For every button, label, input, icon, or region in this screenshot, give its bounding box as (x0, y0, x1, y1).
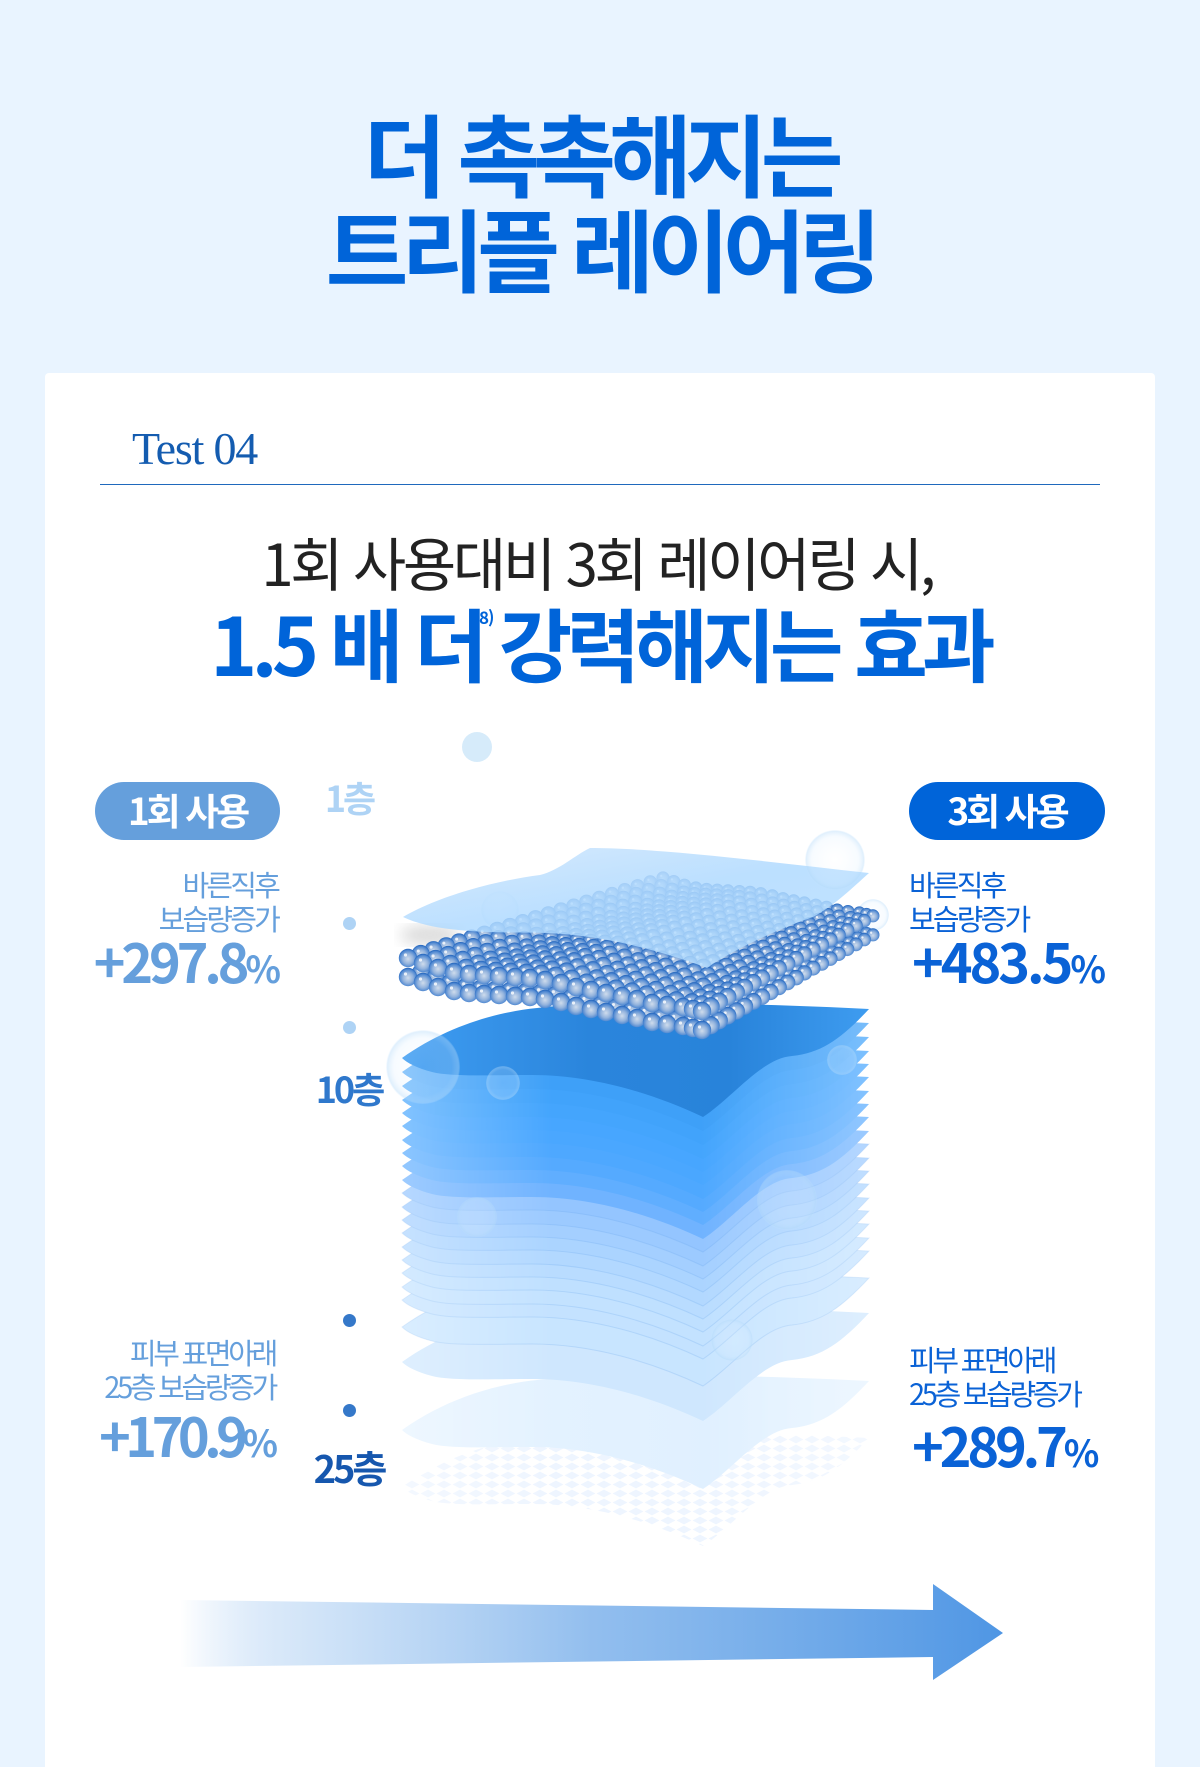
right stat bottom text: 피부 표면아래 (909, 1338, 1054, 1380)
left stat bottom text: 피부 표면아래 (130, 1331, 275, 1373)
footnote mark: 8) (479, 604, 493, 629)
bubbles (386, 732, 865, 1361)
headline: 1.5 배 더 강력해지는 효과 (210, 584, 990, 700)
test label: Test 04 (132, 423, 257, 474)
top translucent sheet (403, 848, 869, 968)
left stat bottom text (104, 1331, 278, 1407)
sphere layer (399, 871, 879, 1039)
left stat top value: +297.8% (94, 920, 280, 999)
divider rule (100, 484, 1100, 485)
layer label 10: 10층 (316, 1062, 382, 1114)
right stat top text: 바른직후 (909, 863, 1005, 905)
title (326, 86, 874, 311)
right stat top text (909, 863, 1030, 939)
left stat top text (159, 863, 280, 939)
right pill: 3회 사용 (947, 782, 1067, 836)
subtitle: 1회 사용대비 3회 레이어링 시, (261, 519, 933, 603)
right stat bottom text: 25층 보습량증가 (909, 1372, 1080, 1414)
sheet stack (402, 1003, 869, 1546)
soft shadow under top sheet (400, 925, 460, 945)
right stat top text: 보습량증가 (909, 897, 1028, 939)
title: 트리플 레이어링 (326, 181, 874, 311)
dot (343, 917, 356, 930)
left stat top text: 바른직후 (182, 863, 278, 905)
layer label 25: 25층 (314, 1439, 384, 1494)
arrow (180, 1584, 1003, 1680)
left pill (95, 782, 280, 840)
dot (343, 1021, 356, 1034)
right pill (909, 782, 1105, 840)
bubble behind spheres (481, 891, 519, 929)
left stat bottom value: +170.9% (99, 1394, 277, 1473)
right stat top value: +483.5% (912, 920, 1105, 999)
left stat top text: 보습량증가 (159, 897, 278, 939)
left stat bottom text: 25층 보습량증가 (104, 1365, 275, 1407)
dot (343, 1404, 356, 1417)
right stat bottom value: +289.7% (912, 1404, 1098, 1483)
bubble right (857, 899, 889, 931)
layered sheets illustration (194, 732, 1003, 1680)
title: 더 촉촉해지는 (364, 86, 836, 216)
layer label 1: 1층 (325, 771, 373, 823)
right stat bottom text (909, 1338, 1082, 1414)
left pill: 1회 사용 (128, 782, 247, 836)
panel: test card (45, 373, 1155, 1767)
dot (343, 1314, 356, 1327)
